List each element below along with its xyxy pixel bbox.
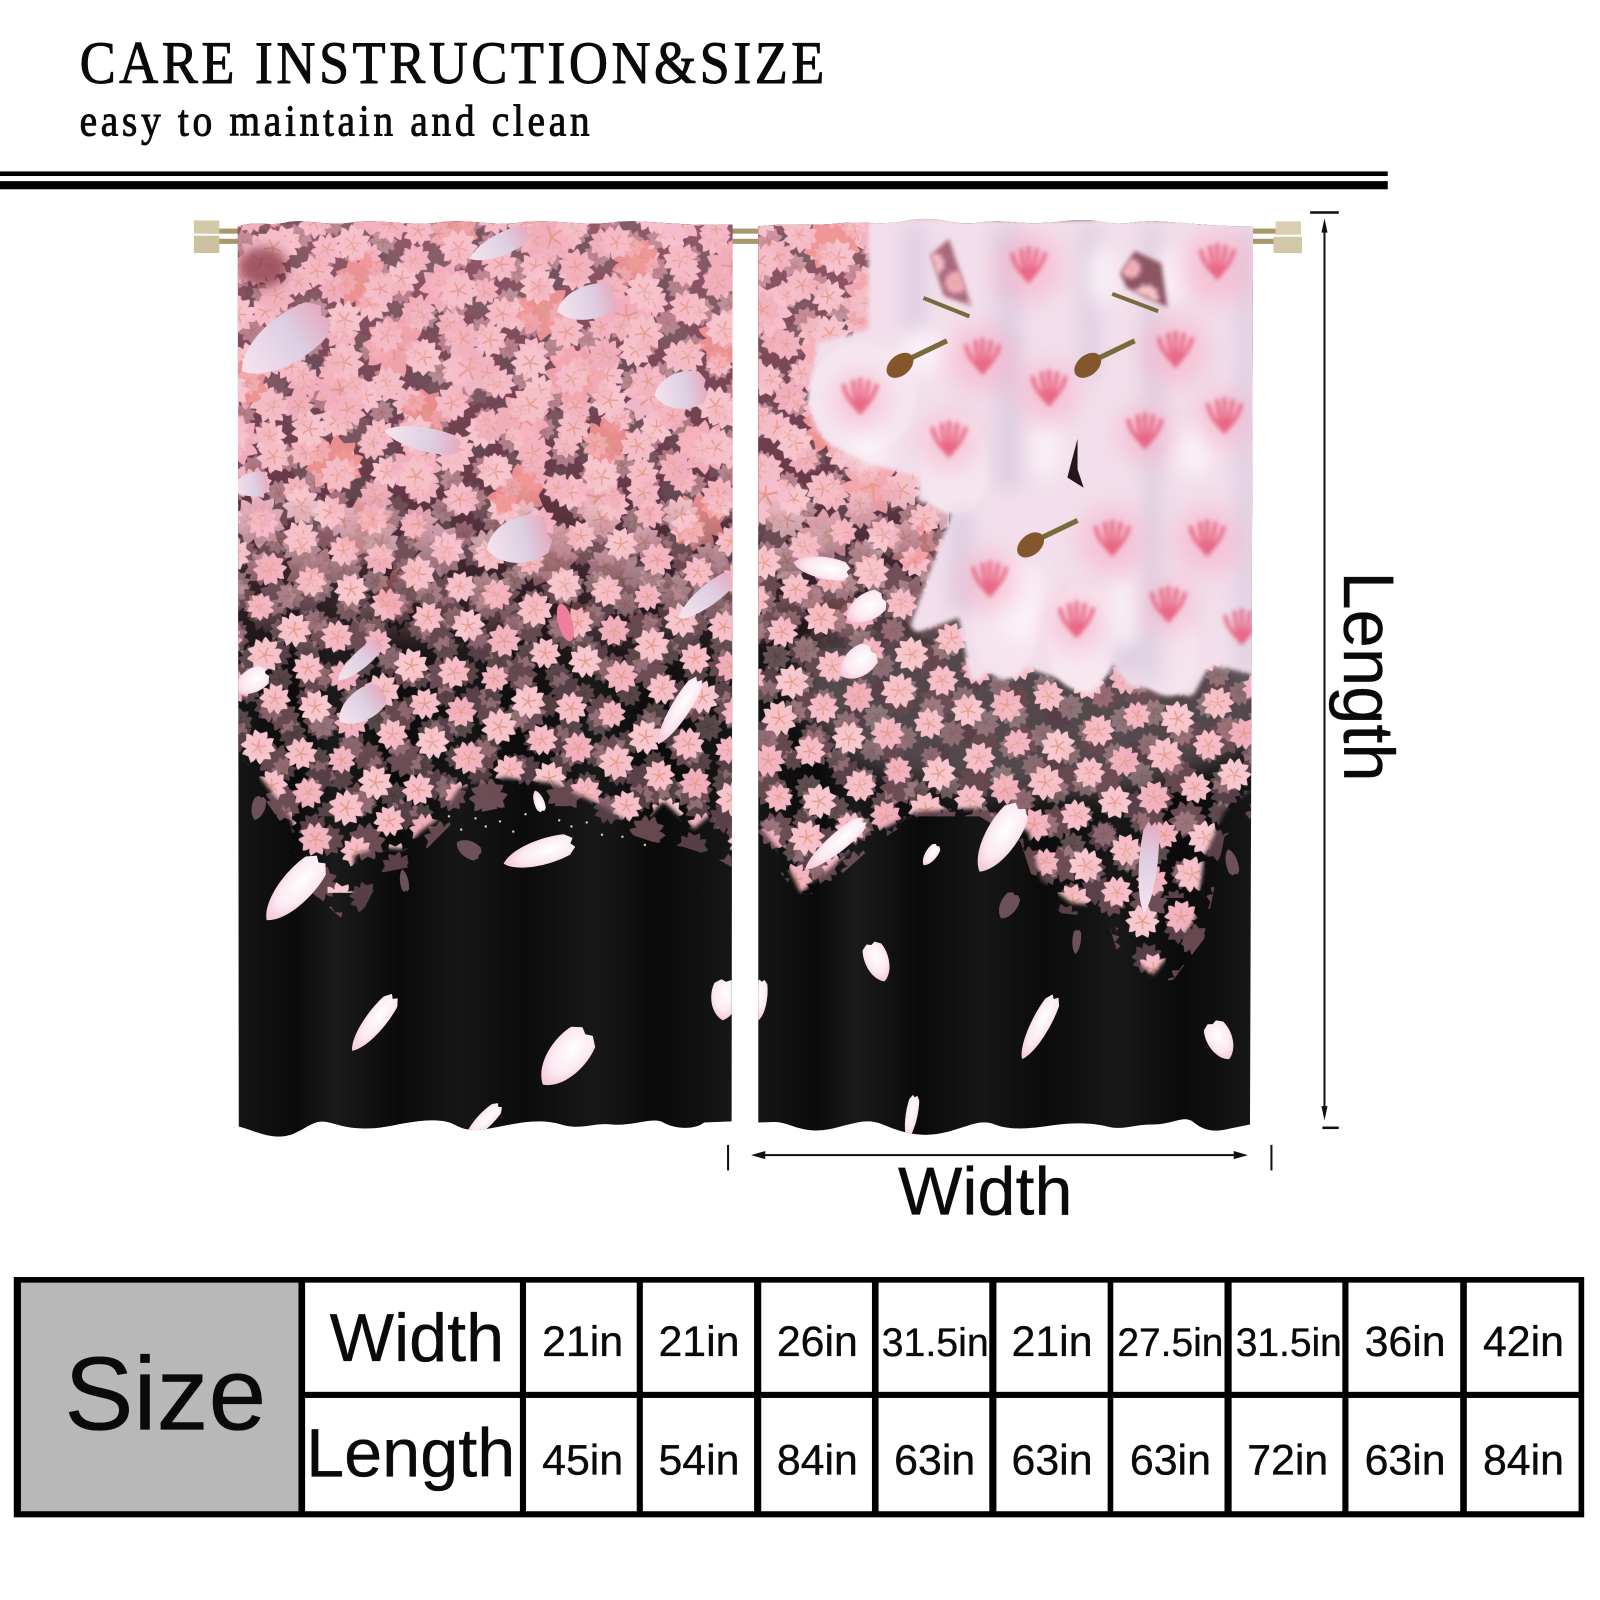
dark-red shadow upper left (239, 247, 288, 288)
width label: Width (898, 1154, 1072, 1229)
twigs (882, 294, 1158, 563)
size cell: Size (64, 1337, 266, 1453)
length values: 72in (1247, 1436, 1328, 1484)
width values: 26in (777, 1318, 858, 1366)
length values: 63in (1012, 1436, 1093, 1484)
subtitle: easy to maintain and clean (80, 96, 590, 146)
size table (14, 1277, 1584, 1517)
haze behind right flowers (796, 571, 1286, 796)
length values: 54in (658, 1436, 739, 1484)
length values (542, 1436, 1564, 1484)
length values: 63in (1130, 1436, 1211, 1484)
width values: 36in (1365, 1318, 1446, 1366)
width values: 21in (658, 1318, 739, 1366)
length values: 63in (1365, 1436, 1446, 1484)
large white blossoms (809, 224, 1258, 696)
length values: 84in (1483, 1436, 1564, 1484)
right curtain panel (752, 219, 1286, 1140)
right dark flower layer (755, 219, 1257, 1005)
width dimension arrow (727, 1145, 1272, 1170)
length values: 63in (894, 1436, 975, 1484)
left curtain petals (228, 221, 740, 1145)
table cells (305, 1283, 1579, 1511)
width values: 21in (542, 1318, 623, 1366)
width values: 31.5in (1236, 1321, 1342, 1365)
pink blush (834, 231, 1254, 651)
width values: 21in (1012, 1318, 1093, 1366)
length label: Length (1328, 571, 1408, 782)
left flower field (235, 219, 735, 893)
header double rule (0, 171, 1388, 189)
fold shading (903, 224, 1255, 684)
length values: 45in (542, 1436, 623, 1484)
width values: 31.5in (882, 1321, 989, 1365)
length dimension arrow (1310, 211, 1339, 1129)
row headers (306, 1301, 515, 1492)
blossom centres (844, 245, 1258, 643)
flower patches showing through blossoms (931, 239, 1167, 488)
row headers: Width (330, 1301, 504, 1376)
left curtain panel (228, 219, 740, 1145)
sparkle dots (448, 813, 646, 846)
title: CARE INSTRUCTION&SIZE (80, 31, 824, 97)
petal highlights (847, 245, 1214, 647)
right flower field (755, 219, 1257, 995)
width values (542, 1318, 1564, 1366)
left dark flower layer (235, 219, 735, 934)
right curtain petals (752, 552, 1241, 1140)
width values: 42in (1483, 1318, 1564, 1366)
curtain rod (194, 220, 1302, 253)
size cell (21, 1283, 298, 1511)
length values: 84in (777, 1436, 858, 1484)
row headers: Length (306, 1416, 515, 1492)
width values: 27.5in (1117, 1321, 1223, 1365)
